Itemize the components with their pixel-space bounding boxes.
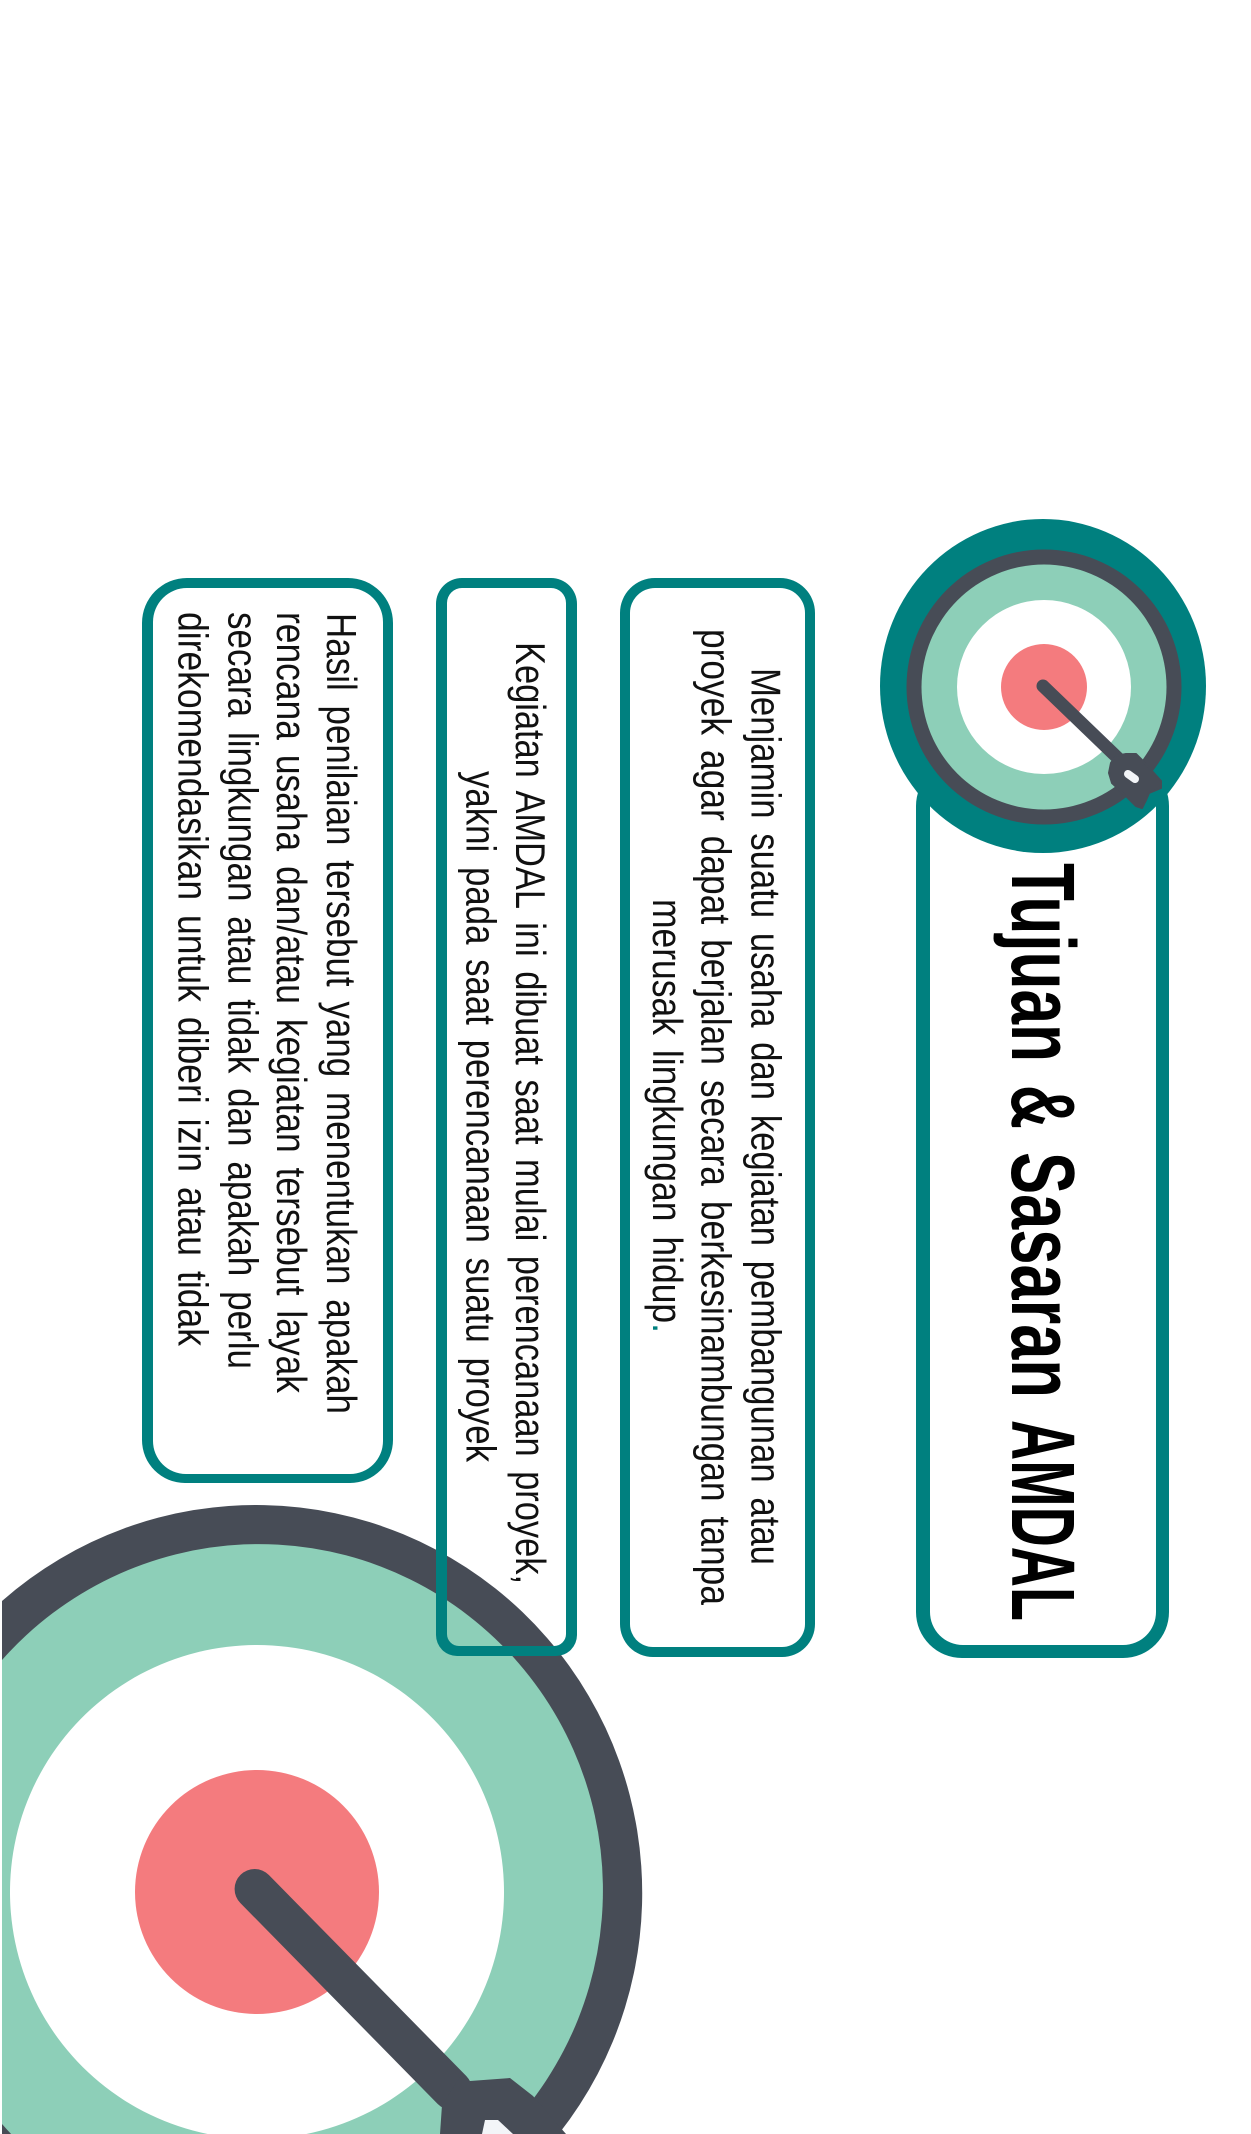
text block: goal 2: [458, 642, 554, 1584]
icon: large target with arrow: [2, 1505, 642, 2134]
title: Sasaran: [992, 1152, 1092, 1398]
text block: goal 3: secara lingkungan atau tidak dan apakah perlu: [220, 612, 266, 1369]
panel: goal box 1: [620, 578, 815, 1657]
panel: goal box 2: [436, 578, 577, 1656]
text block: goal 1: Menjamin suatu usaha dan kegiatan pembangunan atau: [742, 668, 790, 1565]
title: &: [992, 1085, 1092, 1129]
text block: goal 1: proyek agar dapat berjalan secara berkesinambungan tanpa: [693, 629, 740, 1606]
text block: goal 3: direkomendasikan untuk diberi izin atau tidak: [170, 612, 216, 1346]
panel: goal box 3: [142, 578, 393, 1483]
text block: goal 2: yakni pada saat perencanaan suatu proyek: [458, 771, 504, 1462]
title: [992, 863, 1092, 1621]
panel: title box: [916, 760, 1169, 1658]
text block: goal 2: Kegiatan AMDAL ini dibuat saat mulai perencanaan proyek,: [507, 642, 554, 1584]
text block: goal 3: rencana usaha dan/atau kegiatan tersebut layak: [268, 612, 315, 1393]
title: Tujuan: [992, 863, 1092, 1062]
text block: goal 3: [170, 612, 365, 1414]
title: AMDAL: [992, 1420, 1092, 1621]
text block: goal 3: Hasil penilaian tersebut yang menentukan apakah: [318, 613, 365, 1414]
icon: small target with teal disc: [880, 519, 1206, 853]
text block: goal 1: merusak lingkungan hidup.: [644, 899, 691, 1333]
text block: goal 1: [644, 629, 790, 1606]
